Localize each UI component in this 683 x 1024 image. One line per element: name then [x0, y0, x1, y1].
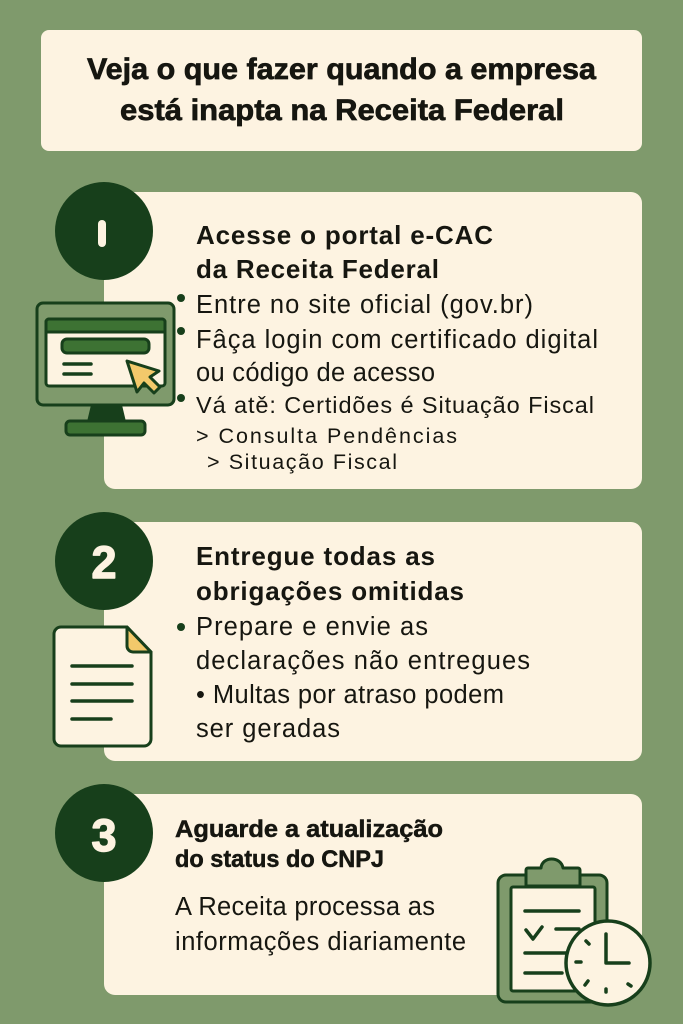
step 1 bullet list: Entre no site oficial (gov.br): [196, 291, 533, 319]
step 1 bullet list: > Situação Fiscal: [207, 450, 397, 474]
step 3 number badge: [55, 784, 153, 882]
step 2 number badge: [55, 512, 153, 610]
panel: step 1: [37, 182, 642, 489]
step 3 heading: [175, 816, 443, 873]
step 2 heading: obrigações omitidas: [196, 576, 464, 606]
step 1 bullet list: Vá atě: Certidões é Situação Fiscal: [196, 392, 594, 418]
step 3 description: [175, 893, 466, 956]
step 3 description: A Receita processa as: [175, 893, 435, 921]
step 2 number badge: 2: [91, 537, 117, 588]
icon: document: [54, 627, 151, 746]
title: Veja o que fazer quando a empresa: [87, 53, 596, 86]
title: está inapta na Receita Federal: [120, 94, 564, 127]
step 3 heading: do status do CNPJ: [175, 846, 384, 873]
step 3 description: informações diariamente: [175, 928, 466, 956]
step 2 bullet list: declarações não entregues: [196, 647, 530, 675]
step 1 number badge: [55, 182, 153, 280]
step 3 number badge: 3: [91, 810, 117, 861]
icon: computer monitor with cursor: [37, 303, 174, 435]
step 1 bullet list: > Consulta Pendências: [196, 424, 457, 448]
step 1 bullet list: [177, 291, 598, 474]
step 1 heading: Acesse o portal e-CAC: [196, 220, 493, 250]
title panel: [41, 30, 642, 151]
icon: clipboard with clock: [498, 859, 650, 1005]
step 1 heading: da Receita Federal: [196, 254, 439, 284]
step 2 bullet list: Prepare e envie as: [196, 613, 428, 641]
step 1 bullet list: ou código de acesso: [196, 359, 435, 387]
step 1 heading: [196, 220, 493, 284]
step 3 heading: Aguarde a atualização: [175, 816, 443, 843]
step 2 heading: [196, 541, 464, 606]
step 2 heading: Entregue todas as: [196, 541, 435, 571]
panel: step 2: [54, 512, 642, 761]
step 2 bullet list: [177, 613, 530, 743]
panel: step 3: [55, 784, 650, 1005]
step 2 bullet list: ser geradas: [196, 715, 340, 743]
step 1 bullet list: Fâça login com certificado digital: [196, 326, 598, 354]
title: [87, 53, 596, 127]
step 2 bullet list: • Multas por atraso podem: [196, 681, 504, 709]
